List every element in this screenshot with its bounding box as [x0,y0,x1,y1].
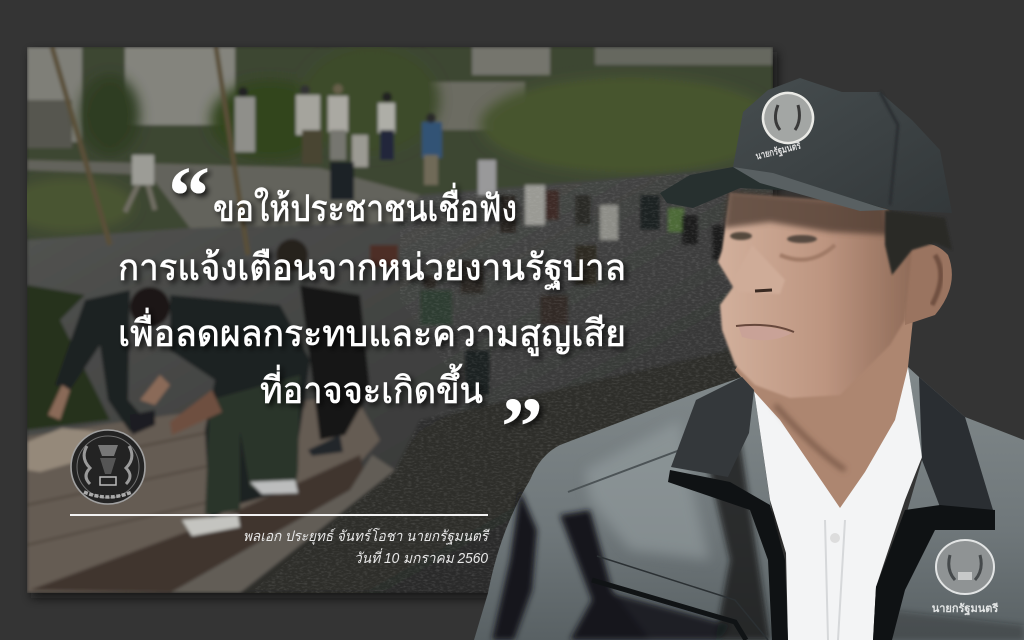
jacket left highlight [585,420,710,560]
cap emblem: นายกรัฐมนตรี [755,140,803,162]
photo: people in the river [370,160,726,395]
person: prime minister in cap and jacket [474,78,1024,640]
photo panel shadow [31,52,777,598]
jacket shading folds [492,430,1024,640]
left collar [671,377,754,477]
photo: river water [27,170,773,468]
quote line 2: การแจ้งเตือนจากหน่วยงานรัฐบาล [118,247,626,290]
jacket chest pocket zip [592,580,746,640]
quote line 1: ขอให้ประชาชนเชื่อฟัง [213,182,517,229]
attribution: date: วันที่ 10 มกราคม 2560 [354,548,488,567]
photo: plank walkway [27,395,380,593]
panel: darkened flood-relief photo [5,45,780,593]
neck [735,300,915,508]
shoulder seam [568,450,680,492]
quote text [118,182,626,411]
photo: buildings on the far bank [27,47,773,148]
right zip placket [873,505,995,640]
photo: trees and greenery [27,72,755,230]
eyes [730,232,835,260]
jacket body [474,367,1024,640]
photo: water grain texture [250,165,773,593]
cap crown [733,78,952,213]
right collar [919,377,993,510]
white shirt [754,367,922,640]
photo: soldiers filling sandbags [48,239,370,536]
shadow under cap brim [724,190,890,235]
photo: onlookers on the bank [125,84,442,212]
cap emblem [755,86,820,162]
face [718,193,912,398]
nose [733,245,785,294]
photo: sandbag embankment [27,160,420,228]
cap seam [880,92,898,205]
jacket emblem: นายกรัฐมนตรี [932,602,998,616]
photo: wooden poles [52,47,248,255]
attribution divider [70,514,488,516]
attribution [243,527,490,567]
photo: plants at left edge [27,285,110,430]
emblem: government seal [71,430,145,504]
cap brim [660,167,890,210]
photo: dark foreground water [244,352,741,593]
shirt shading [825,520,845,640]
ear [905,244,952,325]
quote: opening mark: “ [168,150,210,243]
photo: sandbag on planks [27,428,100,472]
jacket emblem [932,540,998,616]
left zip placket [668,470,788,640]
quote line 4: ที่อาจจะเกิดขึ้น [260,363,483,411]
attribution: name: พลเอก ประยุทธ์ จันทร์โอชา นายกรัฐมนตรี [243,527,490,545]
hair [885,210,952,275]
quote: closing mark: ” [501,381,543,474]
shirt button [830,533,840,543]
mouth [738,325,792,340]
quote line 3: เพื่อลดผลกระทบและความสูญเสีย [118,307,626,356]
